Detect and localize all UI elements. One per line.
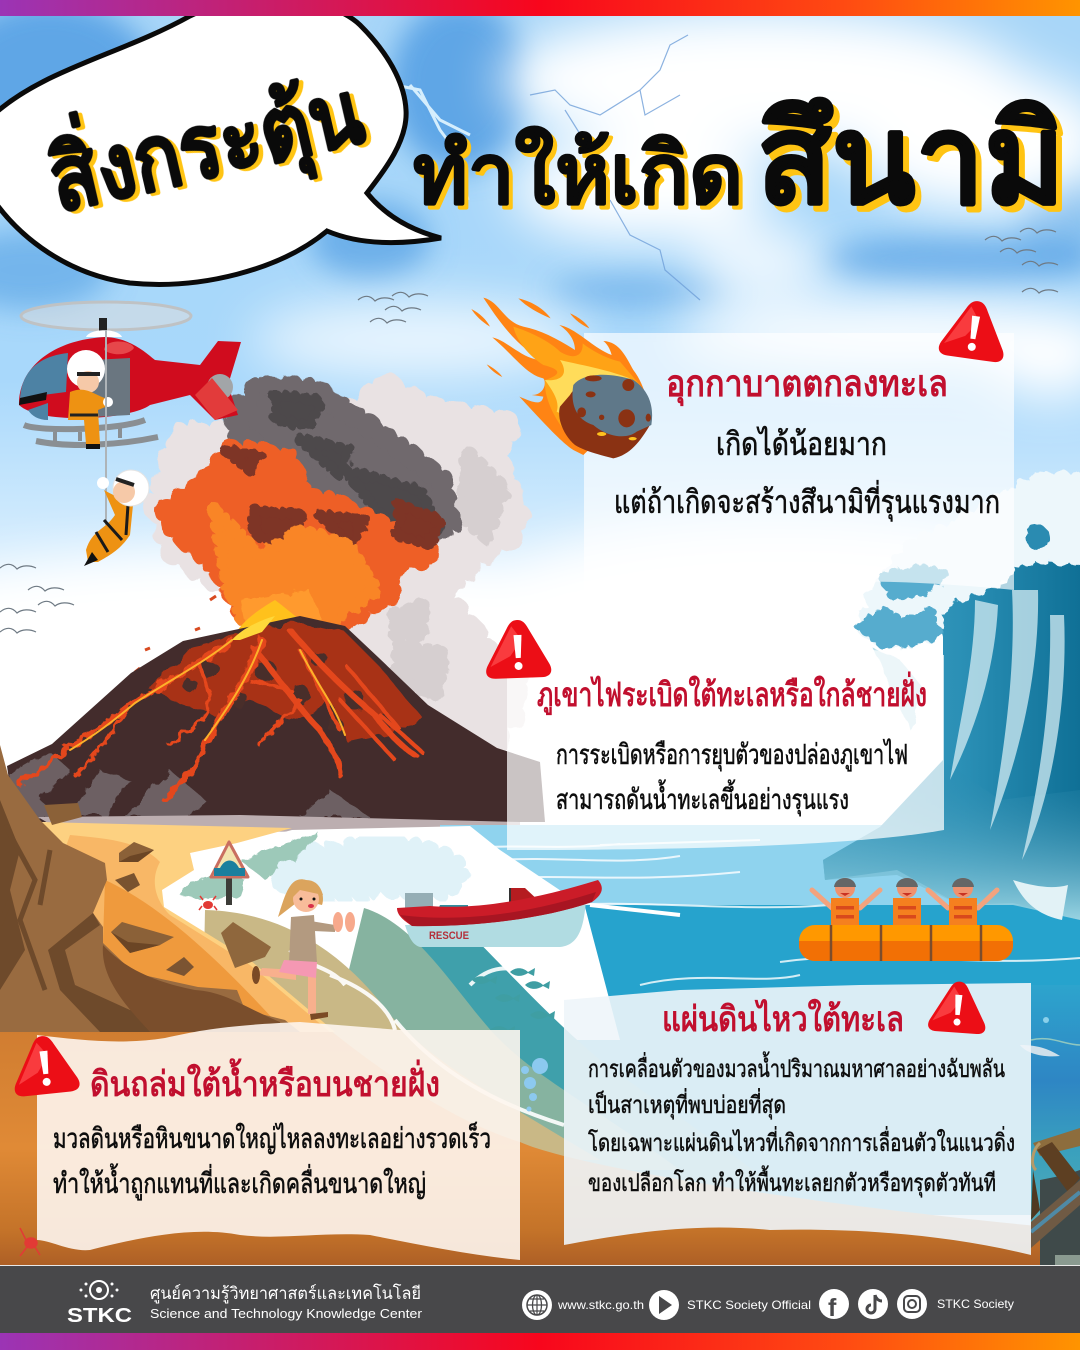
- text: landslide: ดินถล่มใต้น้ำหรือบนชายฝั่ง: [90, 1058, 440, 1104]
- rescue boat: [397, 880, 602, 947]
- social links: www.stkc.go.th: [557, 1298, 644, 1312]
- bubbles: [521, 1058, 548, 1112]
- social links: [522, 1289, 1014, 1322]
- center name: [150, 1283, 423, 1321]
- title line: [413, 89, 1065, 230]
- helicopter: [19, 302, 241, 449]
- running girl: [252, 879, 355, 1020]
- volcano ash plume: [110, 385, 520, 750]
- logo: [67, 1281, 132, 1327]
- text: underwater volcano: การระเบิดหรือการยุบตัวของปล่องภูเขาไฟ: [556, 739, 908, 772]
- crab: [199, 896, 217, 910]
- tsunami wave: [823, 480, 1080, 920]
- rescuer on rope: [84, 330, 149, 566]
- icon: flaming meteor: [471, 298, 652, 458]
- social links: STKC Society Official: [687, 1298, 811, 1312]
- icon: warning triangle earthquake: [928, 980, 988, 1035]
- bottom gradient bar: [0, 1333, 1080, 1350]
- text: meteorite: เกิดได้น้อยมาก: [716, 426, 887, 462]
- icon: warning triangle volcano: [484, 619, 552, 679]
- warning sign: [211, 842, 248, 905]
- logo: STKC: [67, 1305, 132, 1327]
- panel: earthquake: [564, 980, 1031, 1255]
- cliff with falling rocks: [0, 745, 335, 1032]
- center name: ศูนย์ความรู้วิทยาศาสตร์และเทคโนโลยี: [150, 1283, 421, 1304]
- text: underwater volcano: [537, 671, 927, 817]
- social links: f: [828, 1294, 837, 1322]
- rescue label: RESCUE: [429, 930, 469, 942]
- falling boulder: [221, 922, 271, 968]
- text: earthquake: [588, 998, 1015, 1198]
- icon: warning triangle meteorite: [938, 297, 1010, 363]
- text: landslide: มวลดินหรือหินขนาดใหญ่ไหลลงทะเลอย่างรวดเร็ว: [53, 1121, 491, 1154]
- speech bubble: [0, 0, 441, 284]
- icon: warning triangle landslide: [9, 1033, 80, 1097]
- text: underwater volcano: ภูเขาไฟระเบิดใต้ทะเลหรือใกล้ชายฝั่ง: [537, 671, 927, 716]
- text: landslide: ทำให้น้ำถูกแทนที่และเกิดคลื่นขนาดใหญ่: [53, 1163, 426, 1201]
- shipwreck: [1031, 1128, 1080, 1266]
- footer: [0, 1265, 1080, 1334]
- sky background with clouds: [0, 0, 1080, 840]
- volcano mountain: [7, 616, 545, 832]
- right sea strip: [1020, 985, 1080, 1225]
- inflatable raft with survivors: [799, 878, 1013, 961]
- text: earthquake: แผ่นดินไหวใต้ทะเล: [662, 998, 904, 1039]
- top gradient bar: [0, 0, 1080, 16]
- social links: STKC Society: [937, 1297, 1014, 1311]
- lower sand: [0, 1030, 1080, 1266]
- text: earthquake: เป็นสาเหตุที่พบบ่อยที่สุด: [588, 1088, 786, 1120]
- text: landslide: [53, 1058, 491, 1201]
- title line: ทำให้เกิด: [413, 126, 743, 221]
- panel: landslide: [9, 1022, 520, 1260]
- title emphasis: สึนามิ: [757, 89, 1065, 230]
- center name: Science and Technology Knowledge Center: [150, 1306, 423, 1321]
- text: underwater volcano: สามารถดันน้ำทะเลขึ้นอย่างรุนแรง: [556, 779, 849, 817]
- bubble title: สิ่งกระตุ้น: [37, 49, 374, 237]
- crab: lower left: [20, 1228, 40, 1256]
- sea: [300, 825, 1080, 1215]
- text: meteorite: [614, 363, 1000, 522]
- text: meteorite: อุกกาบาตตกลงทะเล: [666, 363, 948, 407]
- panel: meteorite: [584, 297, 1014, 592]
- birds: [0, 228, 1058, 633]
- panel: underwater volcano: [484, 619, 944, 850]
- shallow water and foam: [164, 826, 780, 1190]
